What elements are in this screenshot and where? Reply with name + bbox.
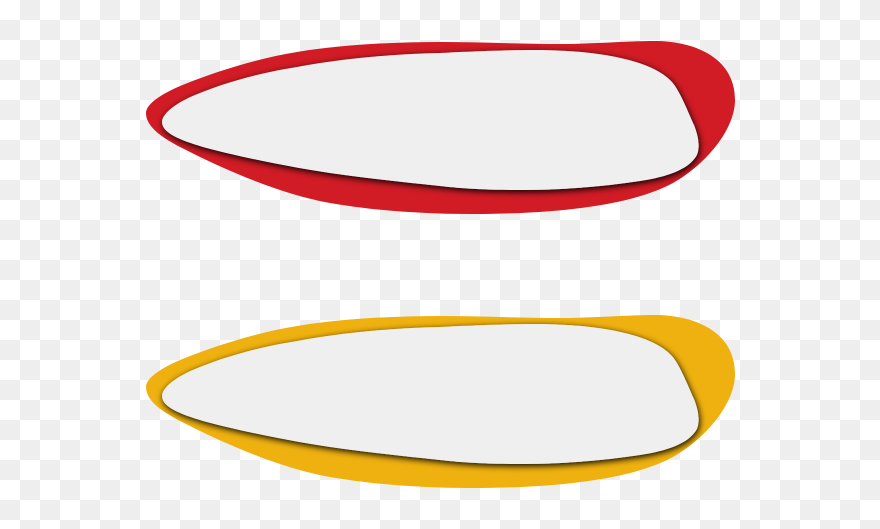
yellow banner inner panel with shadow	[162, 324, 699, 464]
red banner inner panel with shadow	[162, 50, 699, 190]
panel: yellow banner	[146, 315, 735, 488]
panel: red banner	[146, 41, 735, 214]
yellow outer shape	[146, 315, 735, 488]
red outer shape	[146, 41, 735, 214]
